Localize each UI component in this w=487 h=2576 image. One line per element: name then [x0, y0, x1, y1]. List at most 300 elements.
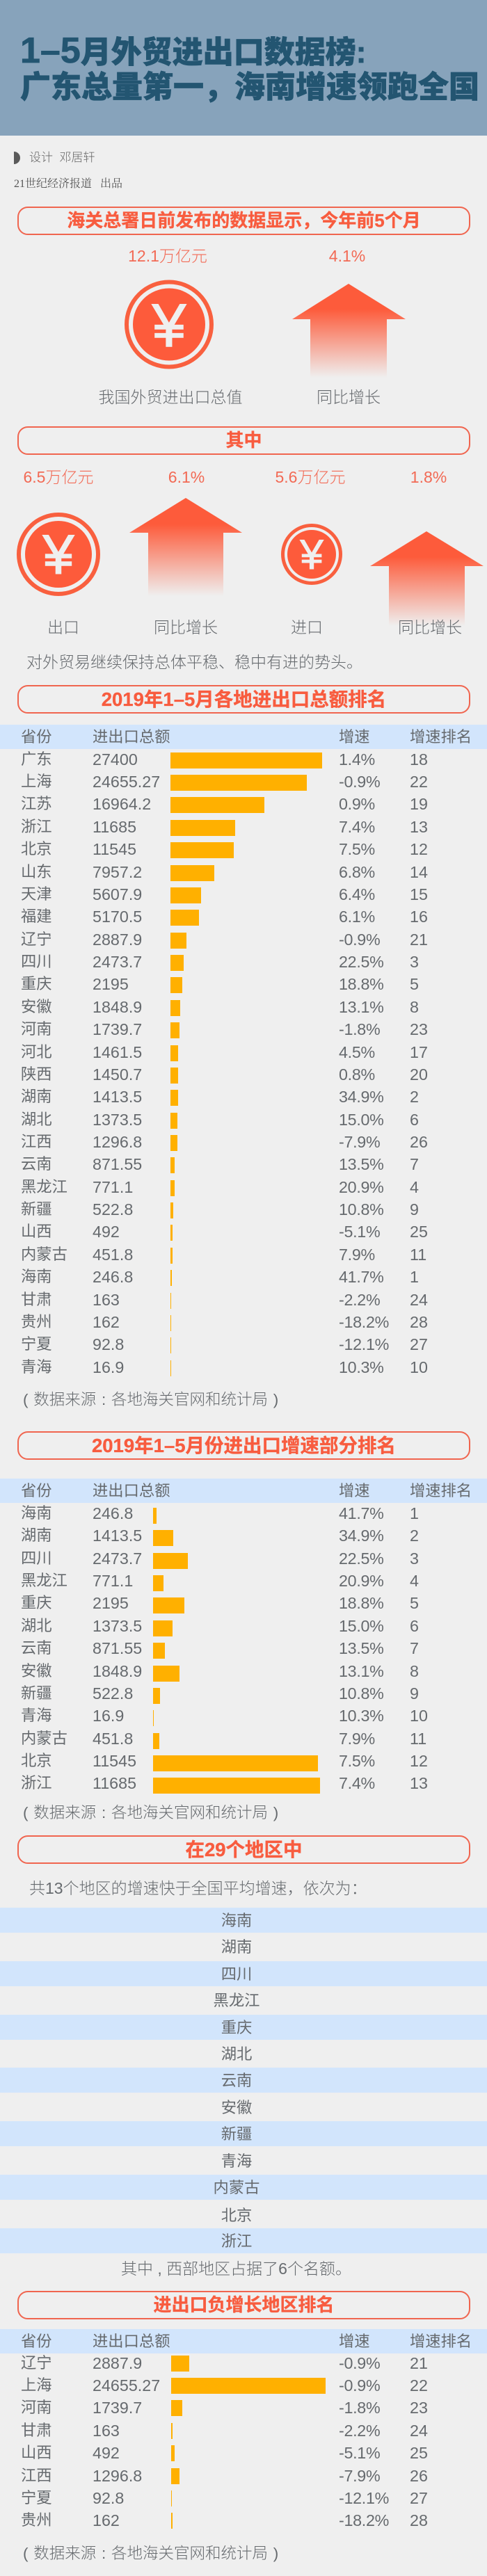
row: 青海 — [21, 1358, 428, 1376]
list item: 云南: 云南 — [221, 2072, 252, 2089]
list: faster-growing regions — [0, 1908, 487, 2255]
row: 山西: 492 — [93, 1223, 120, 1241]
heading: among 29 regions — [17, 1835, 470, 1864]
row: 山东: 山东 — [21, 863, 52, 880]
row: 江苏: 19 — [410, 795, 428, 813]
row: 安徽: 安徽 — [21, 1662, 52, 1680]
row: 广东: 广东 — [21, 750, 52, 768]
row: 青海: 青海 — [21, 1707, 52, 1724]
row: 河南: 1739.7 — [93, 2399, 142, 2417]
value: total growth: 4.1% — [329, 247, 365, 265]
row: 山西: -5.1% — [339, 1223, 380, 1241]
row: 北京: 7.5% — [339, 1752, 375, 1770]
row: 天津: 15 — [410, 885, 428, 903]
row: 浙江 — [21, 818, 428, 836]
title line 2: 广东总量第一，海南增速领跑全国 — [20, 70, 479, 104]
byline: designer — [14, 151, 95, 164]
row: 海南: 246.8 — [93, 1504, 133, 1522]
row: 云南: 云南 — [21, 1155, 52, 1173]
row: 贵州: 162 — [93, 2511, 120, 2529]
list item: 北京: 北京 — [221, 2206, 252, 2224]
row: 上海 — [0, 2374, 487, 2397]
row: 山东: 6.8% — [339, 863, 375, 881]
row: 安徽: 13.1% — [339, 998, 384, 1016]
row: 湖北: 6 — [410, 1111, 419, 1129]
icon: yuan coin, total: ¥ — [152, 292, 186, 360]
row: 四川 — [21, 953, 419, 971]
row: 江苏 — [21, 795, 428, 813]
row: 贵州: 28 — [410, 2511, 428, 2529]
row: 浙江: 7.4% — [339, 1774, 375, 1792]
row: 宁夏: 宁夏 — [21, 2489, 52, 2506]
table header: 增速 — [339, 2333, 370, 2350]
row: 陕西 — [21, 1065, 428, 1084]
label: imports: 进口 — [291, 618, 323, 636]
row: 河北: 河北 — [21, 1043, 52, 1060]
row: 青海: 10 — [410, 1707, 428, 1725]
row: 海南 — [21, 1504, 419, 1524]
row: 甘肃: 24 — [410, 2422, 428, 2440]
row: 湖北: 湖北 — [21, 1617, 52, 1634]
row: 安徽: 8 — [410, 1662, 419, 1680]
label: imports growth: 同比增长 — [398, 618, 462, 636]
row: 四川 — [21, 1549, 419, 1569]
row: 河南: 23 — [410, 1020, 428, 1038]
icon: half circle — [14, 152, 20, 164]
row: 湖南: 2 — [410, 1527, 419, 1545]
row: 湖北: 15.0% — [339, 1617, 384, 1635]
row: 青海: 10.3% — [339, 1707, 384, 1725]
row: 湖北: 15.0% — [339, 1111, 384, 1129]
row: 新疆: 9 — [410, 1200, 419, 1218]
row: 云南: 13.5% — [339, 1155, 384, 1173]
row: 天津: 5607.9 — [93, 885, 142, 903]
row: 浙江: 11685 — [93, 1774, 136, 1792]
row: 甘肃: 24 — [410, 1291, 428, 1309]
row: 河南: 河南 — [21, 1020, 52, 1038]
label: total growth: 同比增长 — [317, 388, 381, 406]
header banner — [0, 0, 487, 136]
row: 贵州: 贵州 — [21, 2511, 52, 2529]
row: 重庆: 18.8% — [339, 1594, 384, 1612]
row: 湖北 — [21, 1617, 419, 1636]
row: 浙江: 11685 — [93, 818, 136, 836]
row: 海南 — [21, 1268, 419, 1286]
row: 四川: 3 — [410, 953, 419, 971]
row: 上海: 22 — [410, 773, 428, 791]
row: 重庆 — [21, 1594, 419, 1613]
byline: publisher: 21世纪经济报道 出品 — [14, 178, 122, 190]
heading: negative growth ranking — [17, 2291, 470, 2319]
row: 湖北: 1373.5 — [93, 1617, 142, 1635]
table: total trade ranking — [0, 725, 487, 1376]
list item: 湖南: 湖南 — [221, 1938, 252, 1956]
row: 四川: 四川 — [21, 1549, 52, 1567]
row: 北京: 7.5% — [339, 840, 375, 858]
row: 黑龙江: 4 — [410, 1178, 419, 1196]
graphics layer: coins and arrows — [17, 280, 484, 623]
row: 四川: 2473.7 — [93, 953, 142, 971]
row: 四川: 22.5% — [339, 953, 384, 971]
row: 北京: 北京 — [21, 840, 52, 858]
row: 甘肃: 163 — [93, 2422, 120, 2440]
list item: 四川: 四川 — [221, 1965, 252, 1983]
label: exports: 出口 — [47, 618, 79, 636]
row: 宁夏: 92.8 — [93, 2489, 124, 2507]
row: 福建: 福建 — [21, 908, 52, 925]
row: 新疆: 10.8% — [339, 1684, 384, 1702]
heading: negative growth ranking: 进出口负增长地区排名 — [153, 2294, 334, 2315]
row: 重庆 — [21, 975, 419, 993]
heading: customs data: 海关总署日前发布的数据显示，今年前5个月 — [67, 210, 421, 231]
row: 江苏: 江苏 — [21, 795, 52, 812]
row: 江苏: 16964.2 — [93, 795, 151, 813]
row: 北京: 11545 — [93, 840, 136, 858]
label: exports growth: 同比增长 — [154, 618, 218, 636]
row: 重庆: 5 — [410, 1594, 419, 1612]
row: 新疆: 522.8 — [93, 1200, 133, 1218]
label: total trade: 我国外贸进出口总值 — [99, 388, 242, 406]
row: 海南: 41.7% — [339, 1504, 384, 1522]
row: 广东: 27400 — [93, 750, 138, 768]
row: 河南: -1.8% — [339, 2399, 380, 2417]
row: 浙江: 浙江 — [21, 818, 52, 835]
title line 1: 1–5月外贸进出口数据榜: — [20, 31, 366, 71]
source note 1: ( 数据来源 : 各地海关官网和统计局 ) — [23, 1391, 278, 1408]
row: 青海 — [0, 1705, 487, 1727]
row: 山西 — [21, 1223, 428, 1241]
icon: yuan coin, exports — [19, 515, 98, 594]
row: 贵州 — [0, 2509, 487, 2531]
row: 云南: 7 — [410, 1155, 419, 1173]
row: 青海: 10.3% — [339, 1358, 384, 1376]
table header: 增速 — [339, 1482, 370, 1499]
row: 北京 — [0, 1750, 487, 1772]
row: 宁夏 — [0, 2487, 487, 2509]
list item: 海南 — [0, 1908, 487, 1933]
row: 北京 — [21, 840, 428, 858]
row: 宁夏: 宁夏 — [21, 1335, 52, 1353]
row: 江苏: 0.9% — [339, 795, 375, 813]
designer name: 设计 邓居轩 — [29, 151, 95, 164]
row: 北京: 12 — [410, 1752, 428, 1770]
row: 河北: 1461.5 — [93, 1043, 142, 1061]
arrow: imports growth — [370, 531, 484, 626]
heading: of which — [17, 426, 470, 455]
row: 湖北: 6 — [410, 1617, 419, 1635]
row: 内蒙古 — [21, 1246, 426, 1264]
row: 青海: 16.9 — [93, 1358, 124, 1376]
row: 湖北 — [21, 1111, 419, 1129]
row: 江西: -7.9% — [339, 1133, 380, 1151]
list item: 新疆: 新疆 — [221, 2125, 252, 2143]
table header: 省份 — [21, 1482, 52, 1499]
row: 北京: 11545 — [93, 1752, 136, 1770]
row: 四川: 22.5% — [339, 1549, 384, 1568]
row: 青海: 16.9 — [93, 1707, 124, 1725]
row: 河南: -1.8% — [339, 1020, 380, 1038]
row: 新疆: 522.8 — [93, 1684, 133, 1702]
table header: 进出口总额 — [93, 2333, 170, 2350]
row: 重庆: 18.8% — [339, 975, 384, 993]
row: 广东 — [21, 750, 428, 768]
row: 内蒙古: 451.8 — [93, 1246, 133, 1264]
row: 宁夏: -12.1% — [339, 1335, 389, 1353]
list item: 内蒙古: 内蒙古 — [214, 2179, 260, 2196]
row: 甘肃: 甘肃 — [21, 2422, 52, 2439]
row: 内蒙古: 451.8 — [93, 1730, 133, 1748]
value: imports: 5.6万亿元 — [276, 468, 345, 486]
heading: total trade ranking — [17, 685, 470, 714]
row: 新疆 — [0, 1682, 487, 1705]
row: 贵州 — [21, 1313, 428, 1331]
row: 湖南: 34.9% — [339, 1088, 384, 1106]
text: western regions note: 其中 , 西部地区占据了6个名额。 — [121, 2260, 351, 2278]
value: exports: 6.5万亿元 — [24, 468, 93, 486]
row: 浙江: 浙江 — [21, 1774, 52, 1792]
row: 黑龙江: 771.1 — [93, 1178, 133, 1196]
row: 甘肃: -2.2% — [339, 2422, 380, 2440]
value: exports growth: 6.1% — [168, 468, 205, 486]
row: 山东: 14 — [410, 863, 428, 881]
row: 新疆: 9 — [410, 1684, 419, 1702]
row: 宁夏: 27 — [410, 1335, 428, 1353]
row: 湖北: 1373.5 — [93, 1111, 142, 1129]
row: 江西 — [0, 2465, 487, 2487]
value: imports growth: 1.8% — [410, 468, 447, 486]
row: 江西: -7.9% — [339, 2467, 380, 2485]
row: 贵州: -18.2% — [339, 2511, 389, 2529]
row: 河北 — [21, 1043, 428, 1061]
row: 新疆: 新疆 — [21, 1200, 52, 1218]
row: 湖南 — [21, 1527, 419, 1546]
row: 山西: 25 — [410, 2444, 428, 2462]
table header: 增速排名 — [410, 1482, 472, 1499]
row: 内蒙古: 内蒙古 — [21, 1246, 67, 1263]
heading: of which: 其中 — [225, 430, 262, 451]
row: 黑龙江: 黑龙江 — [21, 1178, 67, 1196]
row: 山西: 492 — [93, 2444, 120, 2462]
row: 安徽: 安徽 — [21, 998, 52, 1015]
row: 辽宁 — [0, 2352, 487, 2374]
row: 江西: 1296.8 — [93, 2467, 142, 2485]
text: trade summary: 对外贸易继续保持总体平稳、稳中有进的势头。 — [26, 653, 362, 671]
row: 江西: 26 — [410, 2467, 428, 2485]
table header: 增速排名 — [410, 728, 472, 746]
table header: 省份 — [21, 2333, 52, 2350]
table header: 增速排名 — [410, 2333, 472, 2350]
row: 河南: 河南 — [21, 2399, 52, 2416]
row: 新疆 — [21, 1200, 419, 1218]
row: 安徽: 1848.9 — [93, 1662, 142, 1680]
row: 甘肃 — [0, 2420, 487, 2442]
row: 湖南: 湖南 — [21, 1527, 52, 1544]
heading: total trade ranking: 2019年1–5月各地进出口总额排名 — [102, 689, 386, 710]
row: 辽宁: -0.9% — [339, 2354, 380, 2372]
row: 云南: 871.55 — [93, 1639, 142, 1657]
row: 江西 — [21, 1133, 428, 1151]
row: 黑龙江: 20.9% — [339, 1178, 384, 1196]
row: 海南: 海南 — [21, 1504, 52, 1522]
row: 天津: 天津 — [21, 885, 52, 903]
row: 山西: 山西 — [21, 2444, 52, 2461]
row: 陕西: 20 — [410, 1065, 428, 1084]
row: 上海: 上海 — [21, 773, 52, 790]
row: 浙江 — [0, 1772, 487, 1794]
row: 辽宁: 辽宁 — [21, 931, 52, 948]
row: 四川: 2473.7 — [93, 1549, 142, 1568]
row: 甘肃: -2.2% — [339, 1291, 380, 1309]
heading: growth ranking — [17, 1431, 470, 1460]
row: 青海: 青海 — [21, 1358, 52, 1376]
row: 云南: 13.5% — [339, 1639, 384, 1657]
row: 湖北: 湖北 — [21, 1111, 52, 1128]
icon: yuan coin, total — [127, 282, 211, 367]
source note 3: ( 数据来源 : 各地海关官网和统计局 ) — [23, 2545, 278, 2562]
row: 陕西: 1450.7 — [93, 1065, 142, 1084]
row: 云南: 7 — [410, 1639, 419, 1657]
row: 湖南: 湖南 — [21, 1088, 52, 1105]
row: 天津 — [21, 885, 428, 903]
row: 辽宁: 2887.9 — [93, 2354, 142, 2372]
row: 陕西: 0.8% — [339, 1065, 375, 1084]
table: growth ranking — [0, 1479, 487, 1794]
row: 海南: 41.7% — [339, 1268, 384, 1286]
row: 黑龙江: 20.9% — [339, 1572, 384, 1590]
row: 黑龙江 — [21, 1178, 419, 1196]
row: 内蒙古: 内蒙古 — [21, 1730, 67, 1747]
table header — [0, 2329, 487, 2353]
row: 天津: 6.4% — [339, 885, 375, 903]
row: 宁夏 — [21, 1335, 428, 1353]
list item: 安徽: 安徽 — [221, 2099, 252, 2116]
row: 内蒙古 — [0, 1728, 487, 1750]
row: 辽宁: 2887.9 — [93, 931, 142, 949]
row: 辽宁: 辽宁 — [21, 2354, 52, 2372]
row: 宁夏: 27 — [410, 2489, 428, 2507]
table header: 进出口总额 — [93, 728, 170, 746]
row: 海南: 海南 — [21, 1268, 52, 1285]
table: negative growth ranking — [0, 2329, 487, 2534]
list item: 四川 — [0, 1961, 487, 1986]
row: 福建: 5170.5 — [93, 908, 142, 926]
row: 河南: 1739.7 — [93, 1020, 142, 1038]
row: 河南 — [0, 2397, 487, 2419]
row: 上海: 24655.27 — [93, 2376, 160, 2394]
list item: 浙江 — [0, 2228, 487, 2253]
row: 山西: 25 — [410, 1223, 428, 1241]
list item: 海南: 海南 — [221, 1912, 252, 1929]
row: 河南 — [21, 1020, 428, 1038]
row: 甘肃 — [21, 1291, 428, 1309]
icon: yuan coin, imports — [282, 526, 341, 583]
row: 山东 — [21, 863, 428, 881]
row: 重庆: 重庆 — [21, 1594, 52, 1611]
row: 安徽: 8 — [410, 998, 419, 1016]
row: 贵州: 贵州 — [21, 1313, 52, 1330]
row: 贵州: -18.2% — [339, 1313, 389, 1331]
row: 辽宁: -0.9% — [339, 931, 380, 949]
row: 河北: 4.5% — [339, 1043, 375, 1061]
row: 贵州: 162 — [93, 1313, 120, 1331]
table header: 省份 — [21, 728, 52, 746]
row: 辽宁 — [21, 931, 428, 949]
row: 江西: 26 — [410, 1133, 428, 1151]
row: 甘肃: 甘肃 — [21, 1291, 52, 1308]
row: 上海: -0.9% — [339, 2376, 380, 2394]
row: 湖南 — [21, 1088, 419, 1106]
row: 福建: 16 — [410, 908, 428, 926]
row: 内蒙古: 7.9% — [339, 1730, 375, 1748]
row: 云南 — [21, 1639, 419, 1659]
table header — [0, 1479, 487, 1503]
row: 安徽: 1848.9 — [93, 998, 142, 1016]
row: 上海: -0.9% — [339, 773, 380, 791]
row: 安徽 — [0, 1660, 487, 1682]
row: 北京: 12 — [410, 840, 428, 858]
row: 云南: 871.55 — [93, 1155, 142, 1173]
row: 福建 — [21, 908, 428, 926]
row: 湖南: 34.9% — [339, 1527, 384, 1545]
list item: 浙江: 浙江 — [221, 2232, 252, 2250]
row: 重庆: 2195 — [93, 1594, 129, 1612]
row: 四川: 四川 — [21, 953, 52, 970]
heading: among 29 regions: 在29个地区中 — [185, 1839, 303, 1860]
row: 上海: 上海 — [21, 2376, 52, 2394]
table header — [0, 725, 487, 749]
source note 2: ( 数据来源 : 各地海关官网和统计局 ) — [23, 1804, 278, 1821]
row: 安徽 — [21, 998, 419, 1016]
row: 黑龙江: 771.1 — [93, 1572, 133, 1590]
list item: 重庆 — [0, 2015, 487, 2040]
list item: 新疆 — [0, 2121, 487, 2146]
row: 宁夏: -12.1% — [339, 2489, 389, 2507]
row: 内蒙古: 7.9% — [339, 1246, 375, 1264]
row: 福建: 6.1% — [339, 908, 375, 926]
heading: growth ranking: 2019年1–5月份进出口增速部分排名 — [92, 1435, 396, 1456]
list item: 黑龙江: 黑龙江 — [214, 1992, 260, 2009]
value: total trade: 12.1万亿元 — [128, 247, 207, 265]
row: 重庆: 5 — [410, 975, 419, 993]
row: 山西: -5.1% — [339, 2444, 380, 2462]
row: 北京: 北京 — [21, 1752, 52, 1769]
row: 辽宁: 21 — [410, 931, 428, 949]
row: 河南: 23 — [410, 2399, 428, 2417]
row: 甘肃: 163 — [93, 1291, 120, 1309]
row: 湖南: 1413.5 — [93, 1527, 142, 1545]
row: 浙江: 13 — [410, 1774, 428, 1792]
row: 上海: 22 — [410, 2376, 428, 2394]
row: 青海: 10 — [410, 1358, 428, 1376]
arrow: exports growth — [129, 498, 242, 596]
row: 重庆: 重庆 — [21, 975, 52, 992]
list item: 内蒙古 — [0, 2175, 487, 2200]
row: 陕西: 陕西 — [21, 1065, 52, 1083]
row: 重庆: 2195 — [93, 975, 129, 993]
row: 江西: 1296.8 — [93, 1133, 142, 1151]
row: 内蒙古: 11 — [410, 1246, 426, 1264]
row: 黑龙江: 4 — [410, 1572, 419, 1590]
row: 海南: 246.8 — [93, 1268, 133, 1286]
row: 山西 — [0, 2442, 487, 2464]
text: list intro: 共13个地区的增速快于全国平均增速，依次为： — [29, 1879, 367, 1897]
row: 上海 — [21, 773, 428, 791]
row: 海南: 1 — [410, 1268, 419, 1286]
row: 山东: 7957.2 — [93, 863, 142, 881]
table header: 进出口总额 — [93, 1482, 170, 1499]
list item: 云南 — [0, 2068, 487, 2093]
icon: yuan coin, exports: ¥ — [42, 524, 74, 586]
